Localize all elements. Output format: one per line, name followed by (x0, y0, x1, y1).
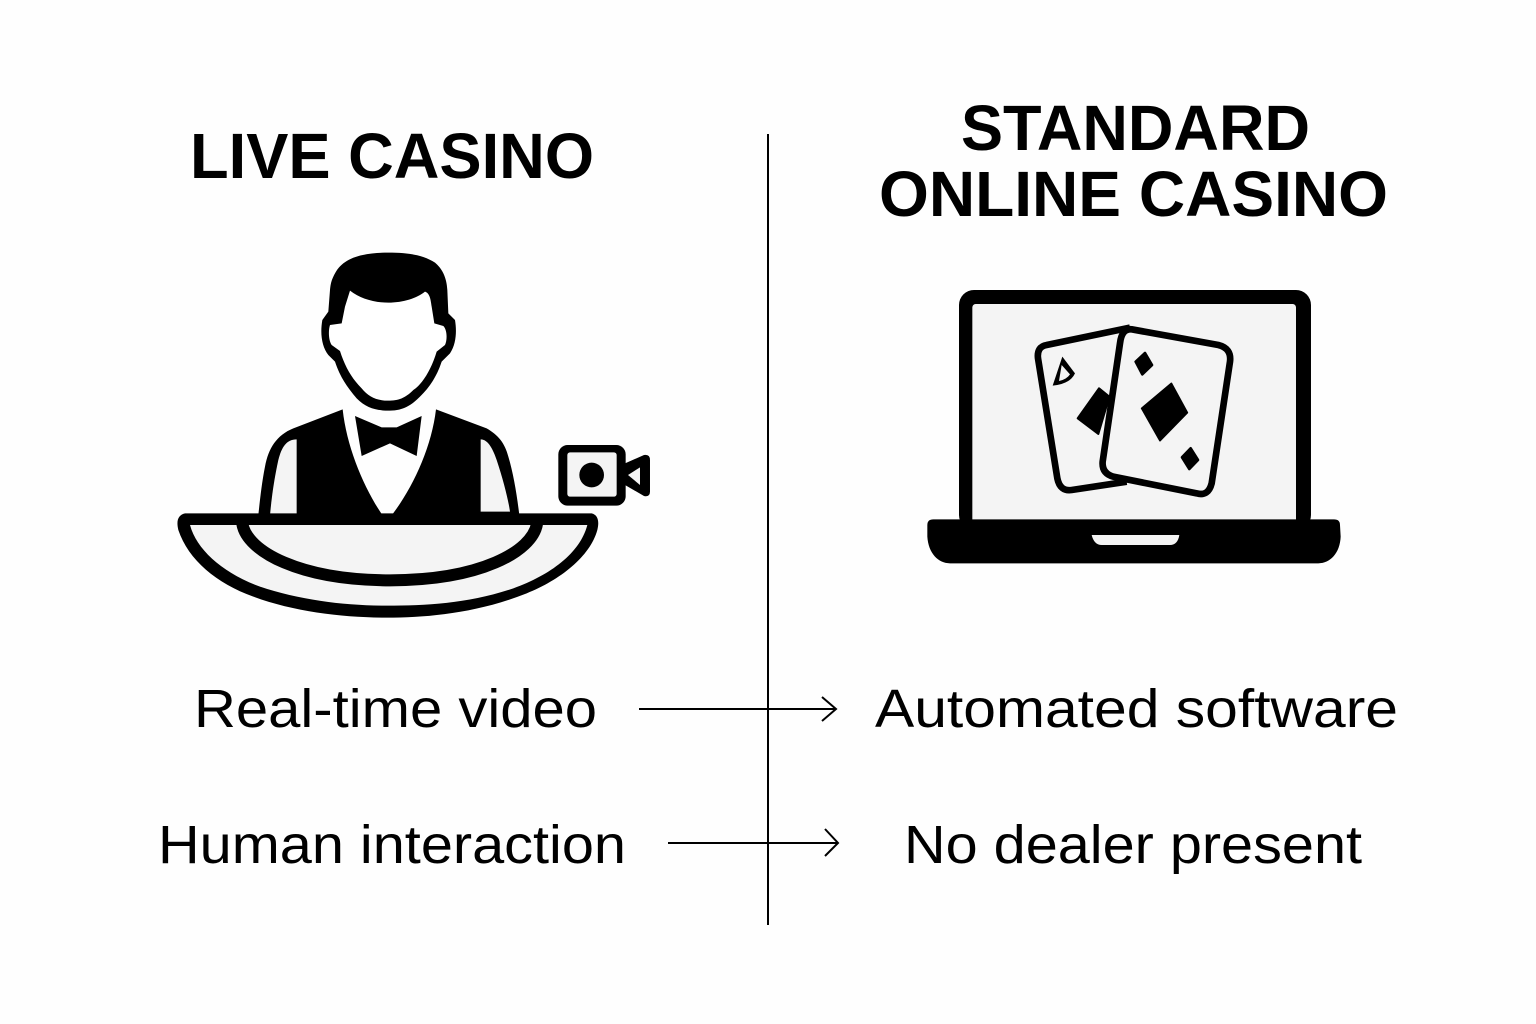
icon: dealer at table with camera (177, 253, 650, 618)
label: real-time video: Real-time video (194, 679, 597, 739)
center divider (767, 134, 769, 925)
arrow: human interaction to no dealer present (668, 829, 838, 856)
heading: standard online casino: STANDARD (961, 92, 1310, 164)
panel: standard online casino (875, 92, 1398, 875)
icon: video camera (558, 445, 650, 506)
playing card: front (1103, 329, 1230, 494)
label: human interaction: Human interaction (158, 815, 626, 875)
heading: standard online casino (879, 92, 1388, 230)
label: no dealer present: No dealer present (904, 815, 1362, 875)
arrow: real-time video to automated software (639, 697, 836, 721)
playing card: back (1038, 328, 1130, 490)
laptop base (927, 519, 1341, 563)
dealer table (177, 513, 598, 618)
laptop screen (959, 290, 1311, 530)
label: automated software: Automated software (875, 679, 1398, 739)
heading: live casino: LIVE CASINO (190, 120, 594, 192)
panel: live casino (158, 120, 650, 875)
dealer head and hair (321, 253, 456, 411)
dealer torso with vest and bow tie (258, 409, 519, 515)
icon: laptop with playing cards (927, 290, 1341, 563)
heading: standard online casino: ONLINE CASINO (879, 158, 1388, 230)
